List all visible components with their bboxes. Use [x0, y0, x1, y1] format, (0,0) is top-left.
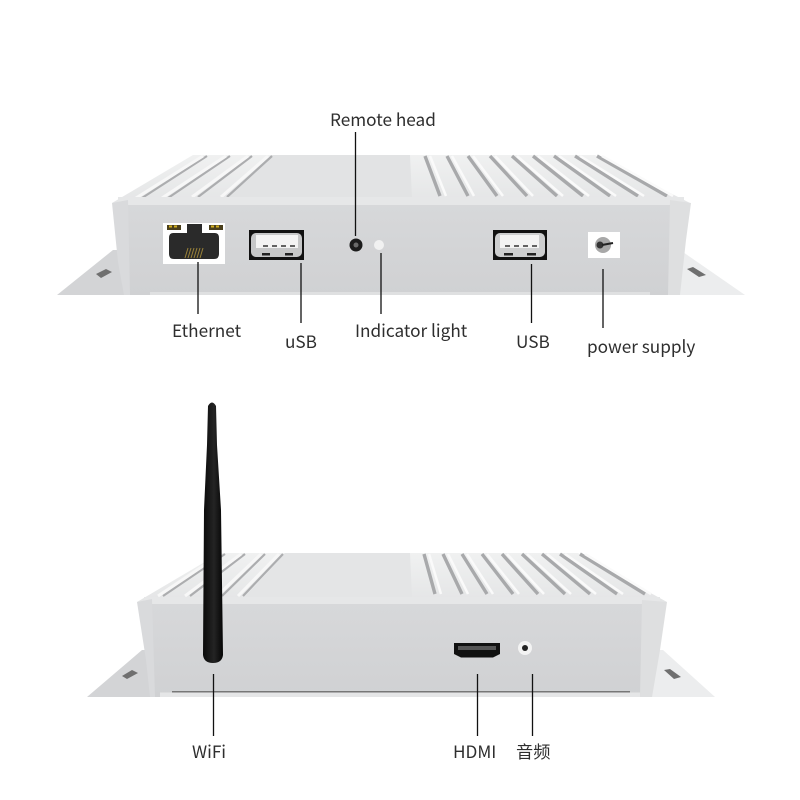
callout: Ethernet — [172, 262, 242, 342]
callout: power supply — [587, 269, 695, 358]
left mounting flange — [87, 650, 165, 697]
callout: Remote head: Remote head — [330, 106, 436, 131]
flange slots — [96, 267, 706, 278]
port: ethernet — [163, 223, 225, 264]
callout: Indicator light — [355, 253, 468, 342]
callout: left USB — [285, 263, 317, 353]
device: top view with ports — [57, 155, 745, 295]
remote head sensor — [350, 238, 362, 252]
front face — [124, 203, 680, 295]
left fins — [136, 156, 272, 198]
right fins — [425, 156, 673, 196]
callout: WiFi — [192, 674, 226, 763]
device: bottom view with antenna — [87, 402, 715, 697]
callout: HDMI — [453, 674, 496, 763]
antenna — [203, 402, 223, 663]
top heat-sink surface — [112, 155, 690, 203]
callout: Remote head — [330, 106, 436, 236]
callout: audio — [516, 674, 550, 763]
callout: left USB: uSB — [285, 328, 317, 353]
port: right USB — [493, 230, 547, 260]
flange slots — [122, 669, 681, 679]
callout: HDMI: HDMI — [453, 738, 496, 763]
right mounting flange — [640, 650, 715, 697]
port: left USB — [249, 230, 304, 260]
port: power supply — [588, 232, 620, 258]
port: audio jack — [518, 641, 532, 655]
indicator light — [374, 240, 384, 250]
port: HDMI — [454, 643, 500, 658]
callout: right USB — [516, 264, 550, 353]
callout: WiFi: WiFi — [192, 738, 226, 763]
top heat-sink surface — [137, 553, 667, 602]
front face — [150, 603, 654, 697]
callout: right USB: USB — [516, 328, 550, 353]
right mounting flange — [670, 250, 745, 295]
right fins — [424, 554, 651, 594]
bottom edge strip — [160, 692, 640, 697]
callout: Indicator light: Indicator light — [355, 317, 468, 342]
left fins — [158, 554, 283, 596]
left mounting flange — [57, 250, 135, 295]
callout: audio: 音频 — [516, 738, 550, 763]
callout: power supply: power supply — [587, 333, 695, 358]
callout: Ethernet: Ethernet — [172, 317, 242, 342]
